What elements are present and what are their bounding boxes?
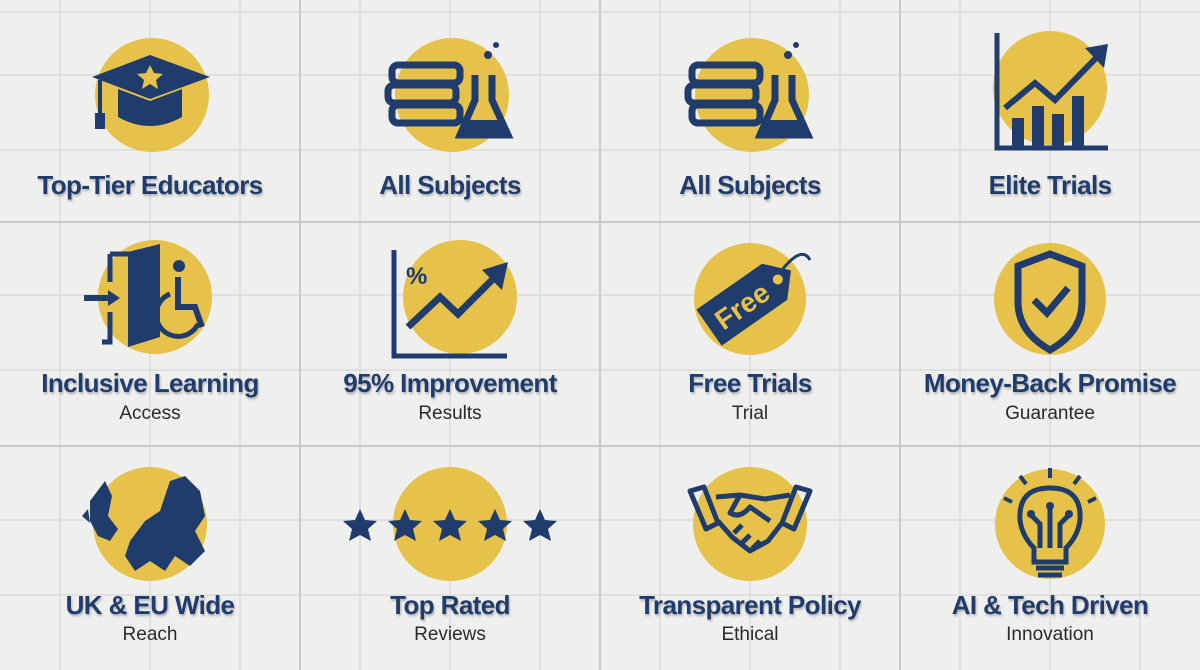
- title: Free Trials: [688, 368, 812, 398]
- title: Transparent Policy: [639, 590, 861, 620]
- panel: All Subjects 1: [379, 38, 522, 202]
- panel: 95% Improvement: [343, 240, 559, 424]
- panel: UK & EU Wide: [66, 467, 236, 645]
- icon: europe map: [82, 467, 207, 581]
- icon: door and wheelchair: [84, 240, 212, 354]
- icon: free tag: Free: [709, 277, 775, 336]
- title: 95% Improvement: [343, 368, 557, 398]
- icon: light bulb circuit: [995, 468, 1105, 579]
- panel: All Subjects 2: [679, 38, 822, 202]
- subtitle: Innovation: [1006, 624, 1094, 645]
- subtitle: Guarantee: [1005, 403, 1095, 424]
- title: UK & EU Wide: [66, 590, 234, 620]
- panel: Free Trials: [688, 243, 814, 424]
- title: Money-Back Promise: [924, 368, 1176, 398]
- icon: books and flask: [684, 38, 814, 152]
- panel: AI & Tech Driven: [952, 468, 1150, 645]
- subtitle: Ethical: [721, 624, 779, 645]
- icon: graduation cap: [92, 38, 210, 152]
- icon: five stars: [343, 467, 557, 581]
- title: Top-Tier Educators: [37, 170, 263, 200]
- panel: Elite Trials: [989, 31, 1113, 200]
- subtitle: Reviews: [414, 624, 486, 645]
- panel: Top Rated: [343, 467, 557, 645]
- icon: growth chart: [993, 31, 1108, 150]
- panel: Transparent Policy: [639, 467, 863, 645]
- title: All Subjects: [379, 170, 521, 200]
- panel: Top-Tier Educators: [37, 38, 264, 202]
- title: Elite Trials: [989, 170, 1111, 200]
- title: AI & Tech Driven: [952, 590, 1148, 620]
- title: All Subjects: [679, 170, 821, 200]
- icon: handshake: [688, 467, 812, 581]
- subtitle: Results: [418, 403, 482, 424]
- subtitle: Reach: [123, 624, 177, 645]
- title: Inclusive Learning: [41, 368, 259, 398]
- icon: percent growth: [392, 240, 517, 358]
- icon: shield check: [994, 243, 1106, 355]
- panel: Money-Back Promise: [924, 243, 1178, 424]
- panel: Inclusive Learning: [41, 240, 260, 424]
- subtitle: Trial: [732, 403, 768, 424]
- icon: free tag: [694, 243, 812, 355]
- title: Top Rated: [390, 590, 510, 620]
- icon: percent growth: %: [406, 263, 427, 290]
- subtitle: Access: [119, 403, 181, 424]
- icon: books and flask: [384, 38, 514, 152]
